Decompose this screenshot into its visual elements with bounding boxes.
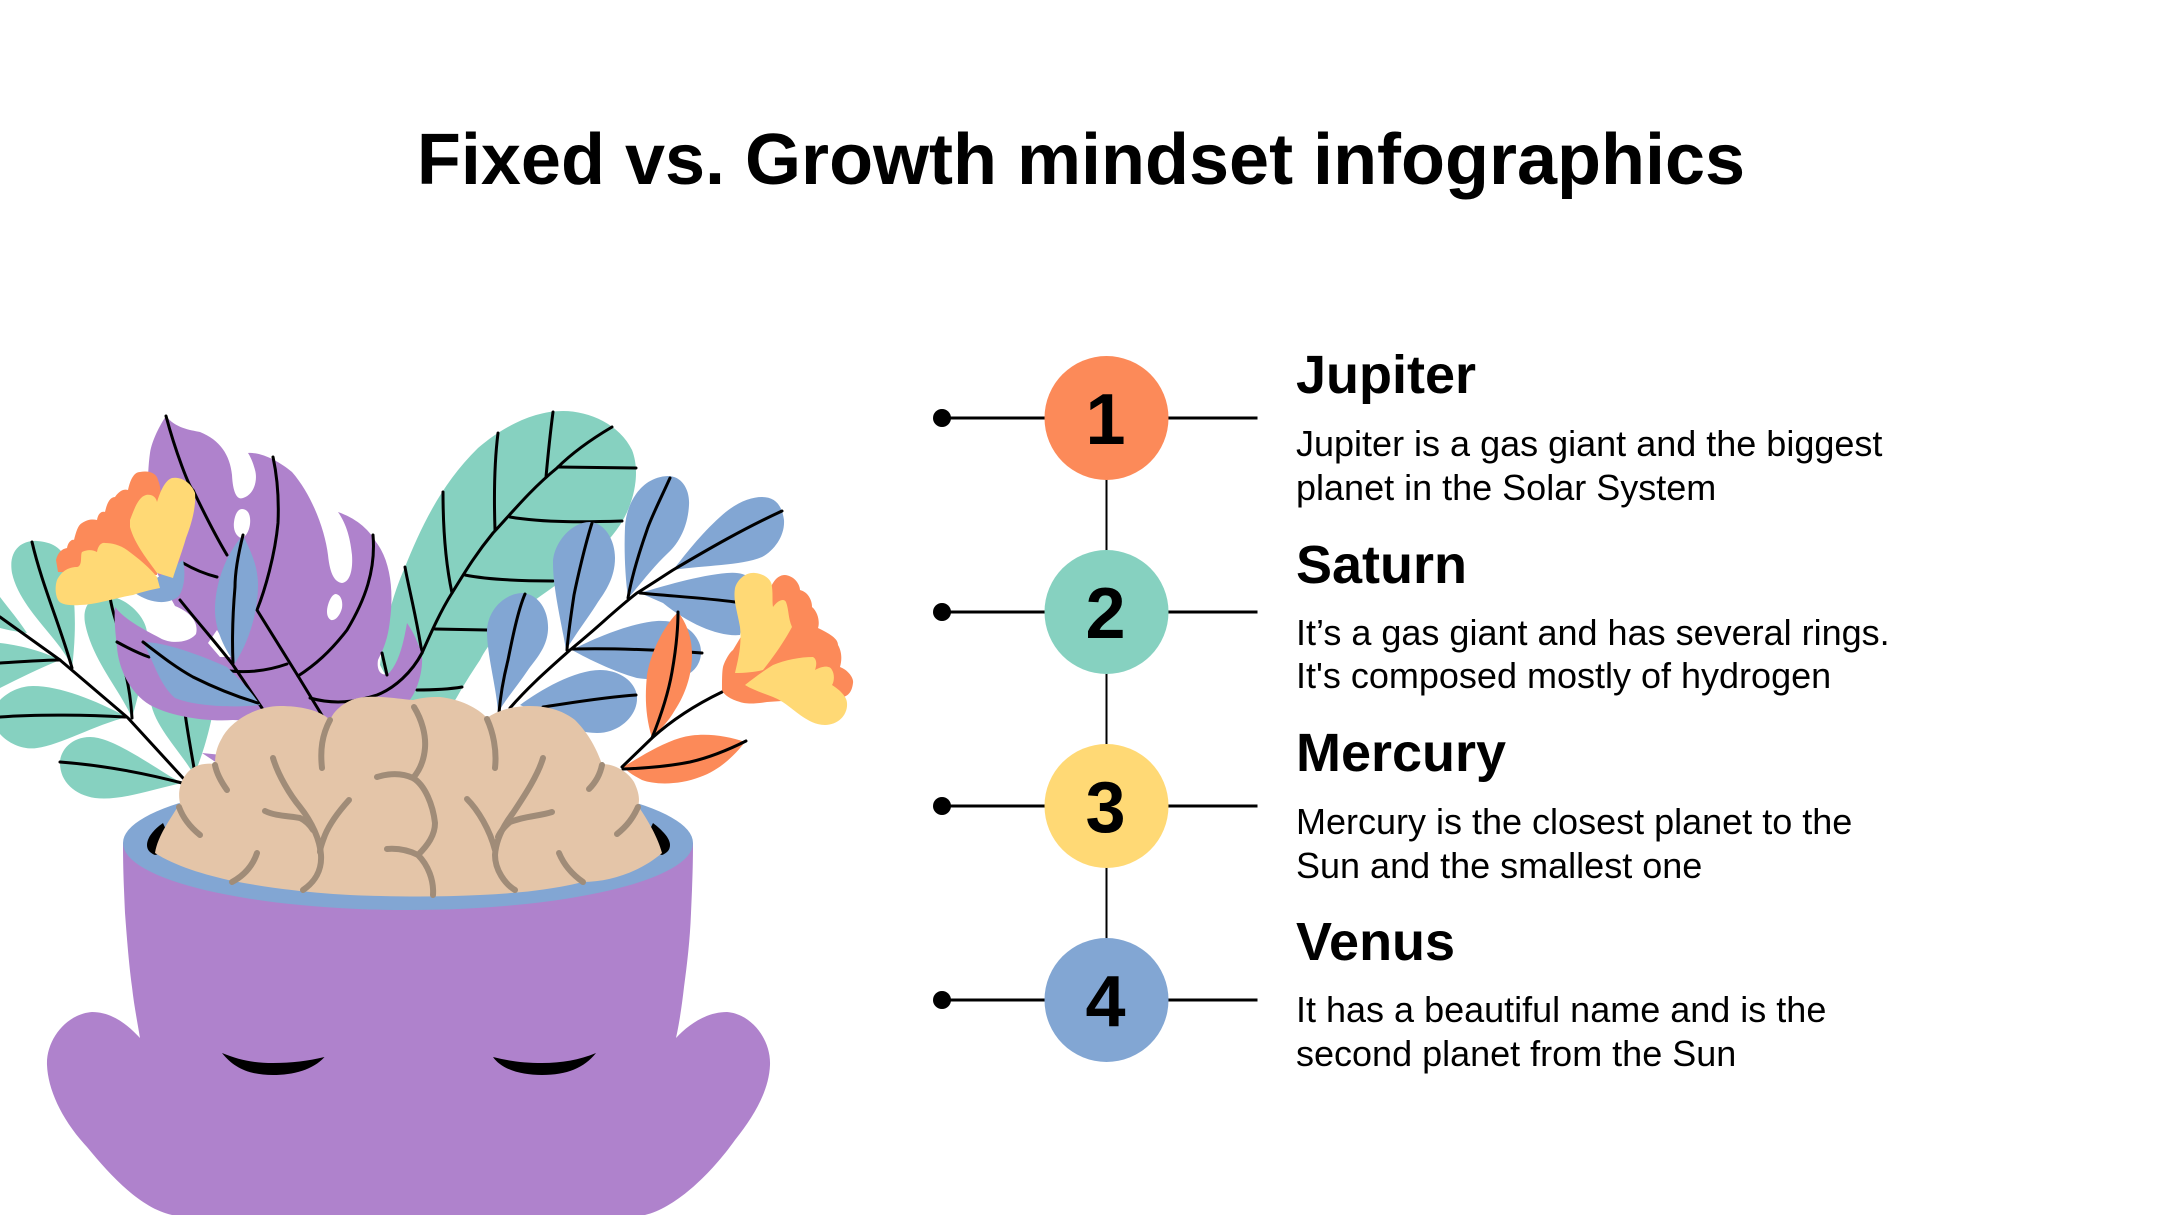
orange leaves [622,612,746,783]
brain [155,697,662,896]
illustration: head pot with brain and plants [0,411,853,1215]
pot rim [123,776,693,910]
step 3: Mercury: 3 [1085,768,1126,848]
step 4: Venus: second planet from the Sun [1296,1033,1736,1074]
step 4: Venus [1044,912,1826,1074]
right flower [722,573,853,725]
step 4: Venus: It has a beautiful name and is the [1296,989,1826,1030]
step 1: Jupiter: Jupiter is a gas giant and the biggest [1296,423,1882,464]
step 3: Mercury [1044,723,1852,886]
step 3: Mercury: Mercury is the closest planet to the [1296,801,1852,842]
step 4: Venus: 4 [1085,962,1126,1042]
purple monstera leaf [115,416,422,725]
step 2: Saturn: It's composed mostly of hydrogen [1296,655,1831,696]
left flower [56,471,195,605]
step 2: Saturn [1044,535,1890,696]
title: Fixed vs. Growth mindset infographics [417,120,1745,200]
big teal leaf [380,411,636,725]
step 2: Saturn: It’s a gas giant and has several rings. [1296,612,1890,653]
step 1: Jupiter: Jupiter [1296,345,1476,405]
closed eyes [222,1053,596,1075]
step 2: Saturn: Saturn [1296,535,1467,595]
brain folds [179,707,638,895]
step 1: Jupiter [1044,345,1882,508]
step 3: Mercury: Sun and the smallest one [1296,845,1702,886]
step 1: Jupiter: 1 [1085,380,1126,460]
purple head pot [47,843,770,1215]
step 1: Jupiter: planet in the Solar System [1296,467,1716,508]
step 4: Venus: Venus [1296,912,1455,972]
blue branch [487,476,784,733]
timeline connectors [933,409,1258,1009]
pot opening [147,823,670,855]
step 2: Saturn: 2 [1085,574,1126,654]
left teal branch [0,541,215,799]
step 3: Mercury: Mercury [1296,723,1506,783]
small purple tip beside brain [202,753,222,763]
blue leaves on purple leaf [135,535,260,706]
